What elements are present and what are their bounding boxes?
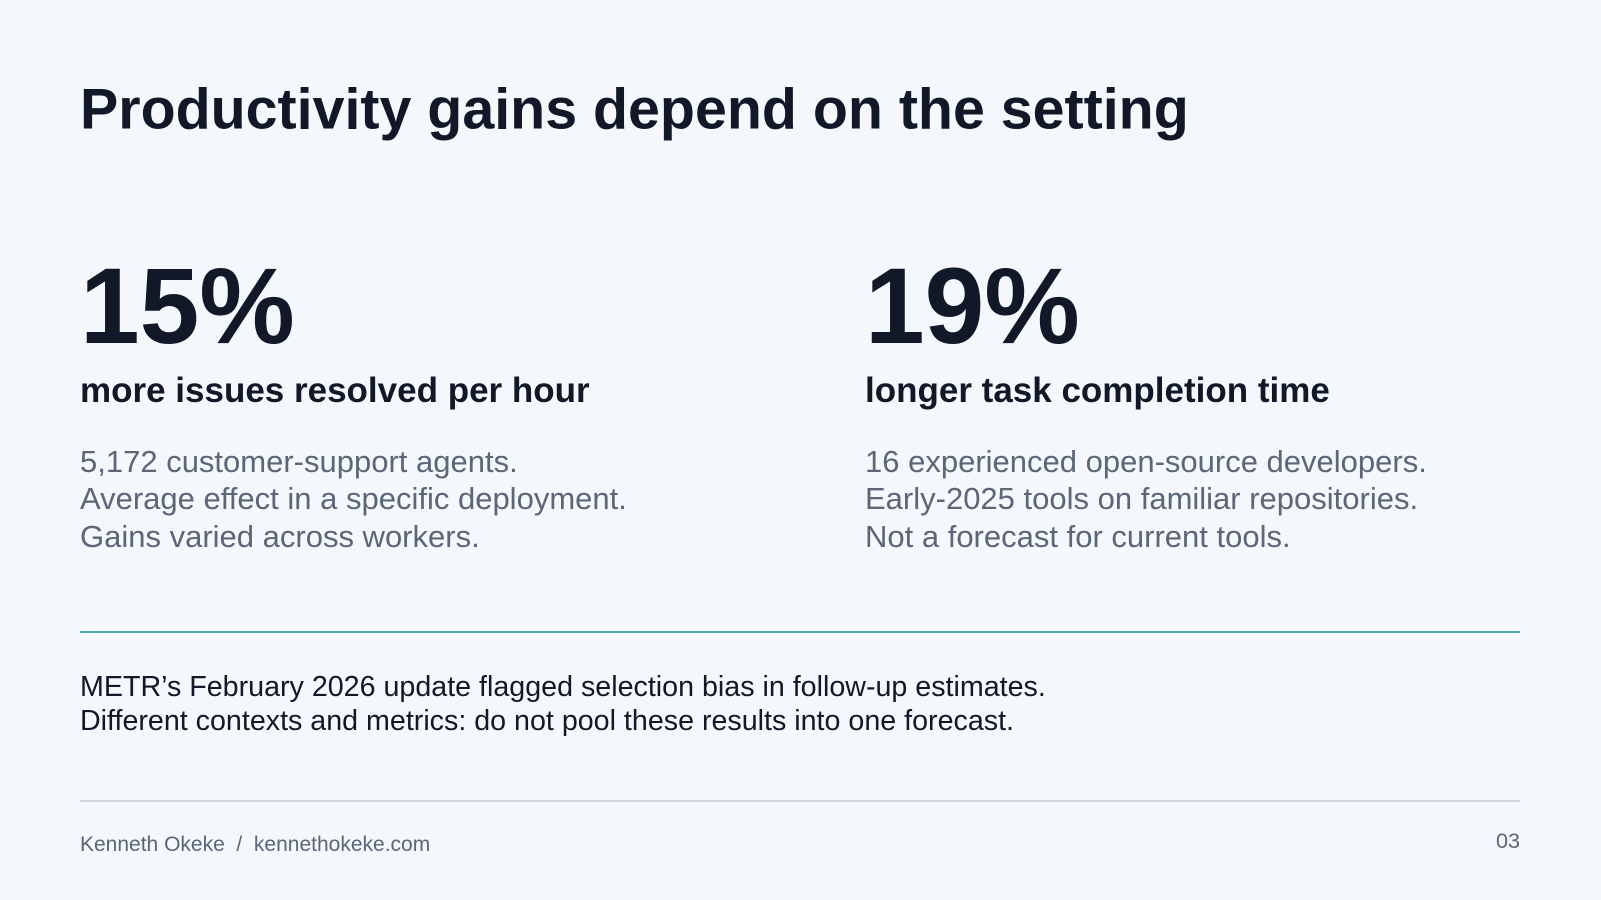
stat details: customer support: Gains varied across workers.: [80, 519, 480, 554]
stat details: customer support: Average effect in a specific deployment.: [80, 481, 627, 516]
caveat note: Different contexts and metrics: do not pool these results into one forecast.: [80, 705, 1014, 737]
big number: 15%: 15%: [80, 246, 295, 366]
stat label: more issues: more issues resolved per hour: [80, 371, 590, 410]
caveat note: [80, 671, 1046, 737]
stat details: developers: Not a forecast for current tools.: [865, 519, 1291, 554]
panel: developer stat: [865, 246, 1427, 554]
page number: 03: [1496, 828, 1520, 853]
stat label: longer task: longer task completion time: [865, 371, 1330, 410]
stat details: developers: [865, 444, 1427, 554]
stat details: developers: 16 experienced open-source developers.: [865, 444, 1427, 479]
panel: customer support stat: [80, 246, 627, 554]
stat details: customer support: [80, 444, 627, 554]
caveat note: METR’s February 2026 update flagged selection bias in follow-up estimates.: [80, 671, 1046, 703]
footer: author and site: Kenneth Okeke / kennethokeke.com: [80, 833, 430, 856]
stat details: customer support: 5,172 customer-support agents.: [80, 444, 518, 479]
title: Productivity gains depend on the setting: [80, 78, 1189, 142]
stat details: developers: Early-2025 tools on familiar repositories.: [865, 481, 1418, 516]
big number: 19%: 19%: [865, 246, 1080, 366]
